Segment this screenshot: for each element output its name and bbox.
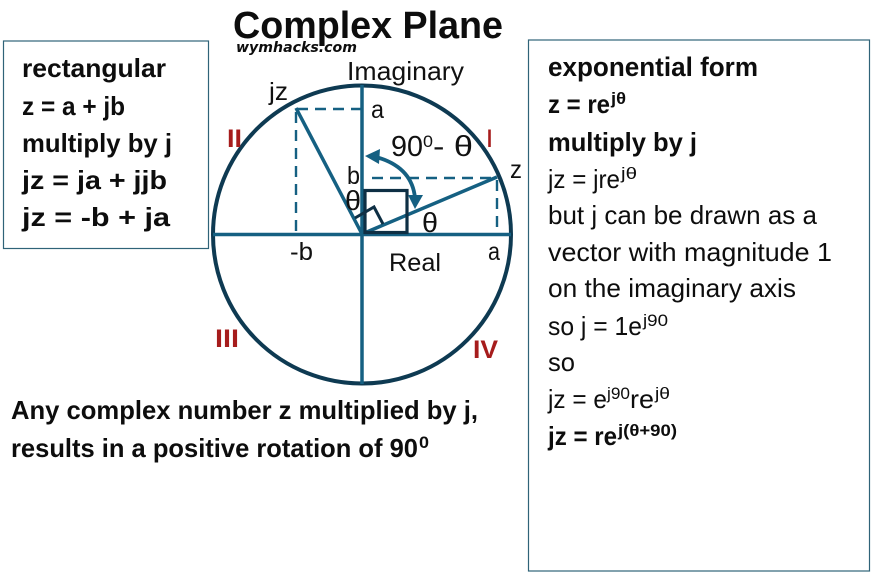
text: multiply by j: multiply by j (548, 127, 697, 157)
text: j as a vector: but j can be drawn as a (548, 200, 818, 230)
equation: jz = jre^jθ: jθ (620, 164, 637, 183)
text: so: so (548, 347, 575, 377)
label: a on real axis: a (488, 238, 500, 266)
equation: jz = jre^jθ: jz = jre (547, 164, 620, 194)
equation: jz = re^j(θ+90) (547, 421, 677, 451)
label: theta right: θ (422, 207, 438, 238)
label: theta left: θ (345, 185, 361, 216)
equation: jz = re^j(θ+90): j(θ+90) (617, 421, 677, 440)
equation: jz = e^j90 re^jθ: jz = e (547, 384, 607, 414)
quadrant III: III (215, 325, 239, 353)
quadrant II: II (227, 125, 242, 153)
equation: so j = 1e^j90: so j = 1e (548, 311, 642, 341)
label: 90 degrees minus theta: 0 (423, 132, 433, 151)
label: 90 degrees minus theta (391, 131, 473, 163)
label: 90 degrees minus theta: - θ (433, 131, 473, 163)
text block: rotation conclusion: 0 (419, 433, 429, 452)
imaginary axis (360, 85, 364, 384)
equation: z = re^jθ: jθ (610, 89, 626, 108)
text block: rotation conclusion: results in a positive rotation of 90 (11, 433, 418, 463)
angle square (365, 190, 407, 232)
heading: exponential form: exponential form (548, 52, 758, 82)
equation: jz = e^j90 re^jθ: re (630, 384, 654, 414)
vector z (362, 177, 497, 234)
equation: jz = e^j90 re^jθ: jθ (654, 384, 670, 403)
panel: exponential form (528, 40, 870, 571)
panel: rectangular form (4, 41, 208, 248)
equation: z = re^jθ: z = re (548, 89, 610, 119)
title: Complex Plane (233, 5, 503, 47)
quadrant IV: IV (473, 336, 498, 364)
equation: so j = 1e^j90: j90 (642, 311, 668, 330)
label: a on imaginary axis: a (371, 96, 384, 124)
label: 90 degrees minus theta: 90 (391, 131, 423, 163)
equation: jz = e^j90 re^jθ (547, 384, 670, 414)
angle arc with arrows (365, 149, 423, 209)
label: b: b (347, 162, 360, 190)
equation: jz = -b + ja: jz = -b + ja (21, 202, 171, 232)
equation: z = a + jb: z = a + jb (22, 91, 125, 121)
text block: rotation conclusion: Any complex number z multiplied by j, (11, 395, 478, 425)
dashed projections (296, 109, 497, 234)
equation: jz = e^j90 re^jθ: j90 (606, 384, 630, 403)
label: z: z (510, 156, 522, 184)
text: j as a vector: on the imaginary axis (548, 273, 796, 303)
label: Real: Real (389, 249, 441, 277)
heading: rectangular: rectangular (22, 53, 166, 83)
unit circle (213, 86, 511, 384)
text: j as a vector: vector with magnitude 1 (548, 237, 832, 267)
right angle marker (355, 207, 383, 224)
label: Imaginary: Imaginary (347, 56, 464, 86)
label: jz: jz (268, 78, 288, 106)
label: -b: -b (290, 238, 313, 266)
website credit: wymhacks.com (236, 40, 357, 56)
text block: rotation conclusion (11, 395, 478, 463)
equation: jz = ja + jjb: jz = ja + jjb (21, 165, 167, 195)
chart: complex plane diagram (213, 56, 522, 384)
text: j as a vector (548, 200, 832, 303)
equation: jz = re^j(θ+90): jz = re (547, 421, 617, 451)
real axis (213, 233, 511, 236)
text: multiply by j: multiply by j (22, 128, 172, 158)
quadrant I: I (487, 125, 492, 153)
vector jz (296, 108, 362, 234)
